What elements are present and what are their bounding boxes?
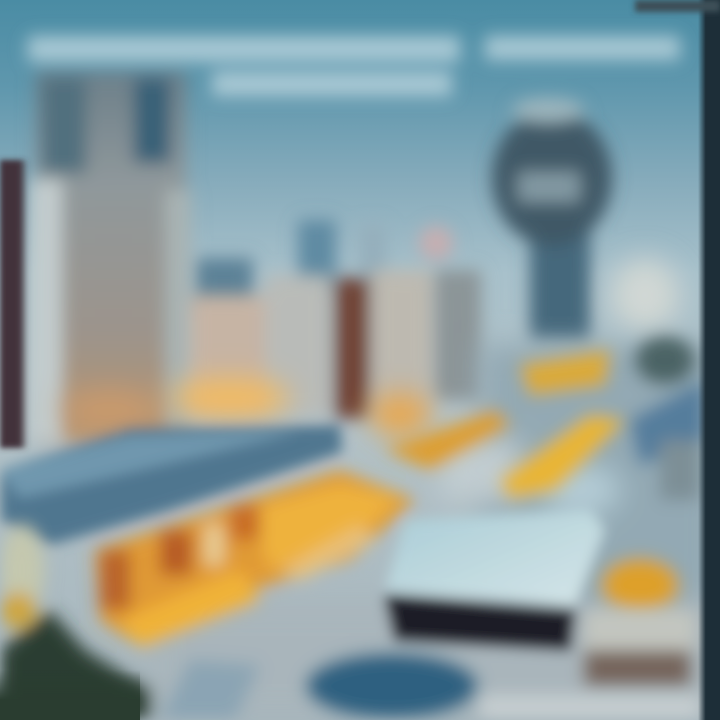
control tower — [492, 98, 612, 340]
lamp post arm — [635, 0, 720, 12]
blue canopy roof — [0, 425, 342, 545]
orange plaza lights — [95, 470, 415, 648]
bottom left plants — [0, 525, 150, 720]
bottom left plant base — [0, 670, 140, 720]
right side dark foliage — [630, 336, 705, 500]
glow behind tower — [611, 259, 679, 331]
dark left edge building — [0, 160, 28, 448]
warm street glow behind buildings — [62, 378, 430, 437]
mid buildings — [190, 270, 481, 420]
pale road strip — [480, 695, 700, 720]
white vehicle roof — [385, 510, 605, 650]
foreground blue car — [307, 654, 477, 718]
dark lamp post — [698, 0, 720, 720]
foreground light road — [160, 660, 260, 720]
right lower ground — [150, 345, 720, 720]
far background towers — [195, 220, 453, 308]
title placeholder bars — [28, 36, 680, 96]
tall left tower — [30, 72, 191, 442]
right planter — [585, 610, 695, 685]
yellow light streaks — [385, 350, 678, 611]
